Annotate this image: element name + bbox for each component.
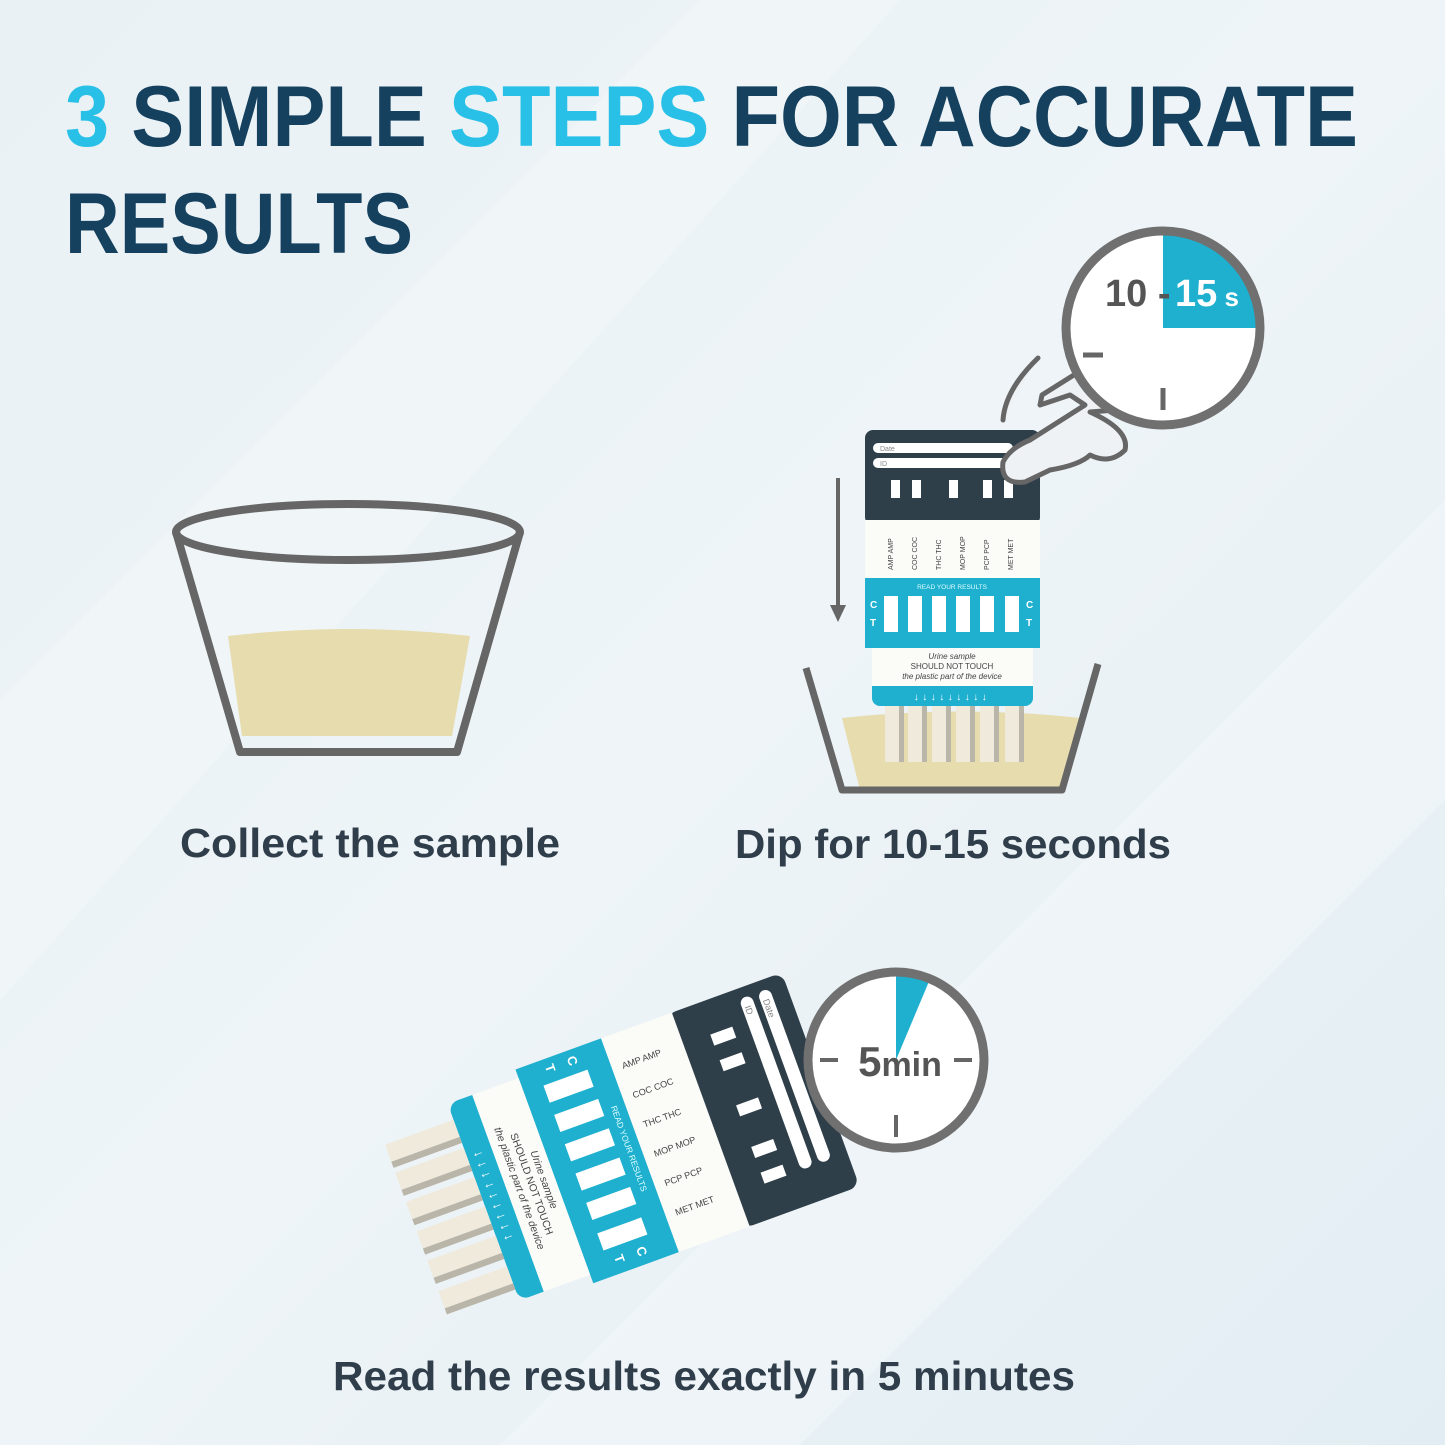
icon: cup with sample — [176, 504, 520, 752]
icon: timer 10-15s: 15 s — [1175, 273, 1239, 315]
title: 3 SIMPLE STEPS FOR ACCURATE — [65, 69, 1358, 165]
icon: timer 10-15s — [1066, 231, 1260, 425]
caption: dip: Dip for 10-15 seconds — [735, 821, 1171, 867]
title — [65, 69, 1358, 272]
title: RESULTS — [65, 176, 413, 272]
icon: timer 10-15s: 10 - — [1105, 273, 1170, 315]
icon: rotated device reading — [376, 973, 860, 1334]
icon: timer 5 min — [808, 972, 984, 1148]
icon: timer 5 min: 5min — [858, 1038, 942, 1085]
caption: collect: Collect the sample — [180, 820, 560, 866]
caption: read results: Read the results exactly in 5 minutes — [333, 1353, 1075, 1399]
icon: dipping device — [806, 430, 1098, 790]
icon: hand — [1003, 358, 1178, 482]
